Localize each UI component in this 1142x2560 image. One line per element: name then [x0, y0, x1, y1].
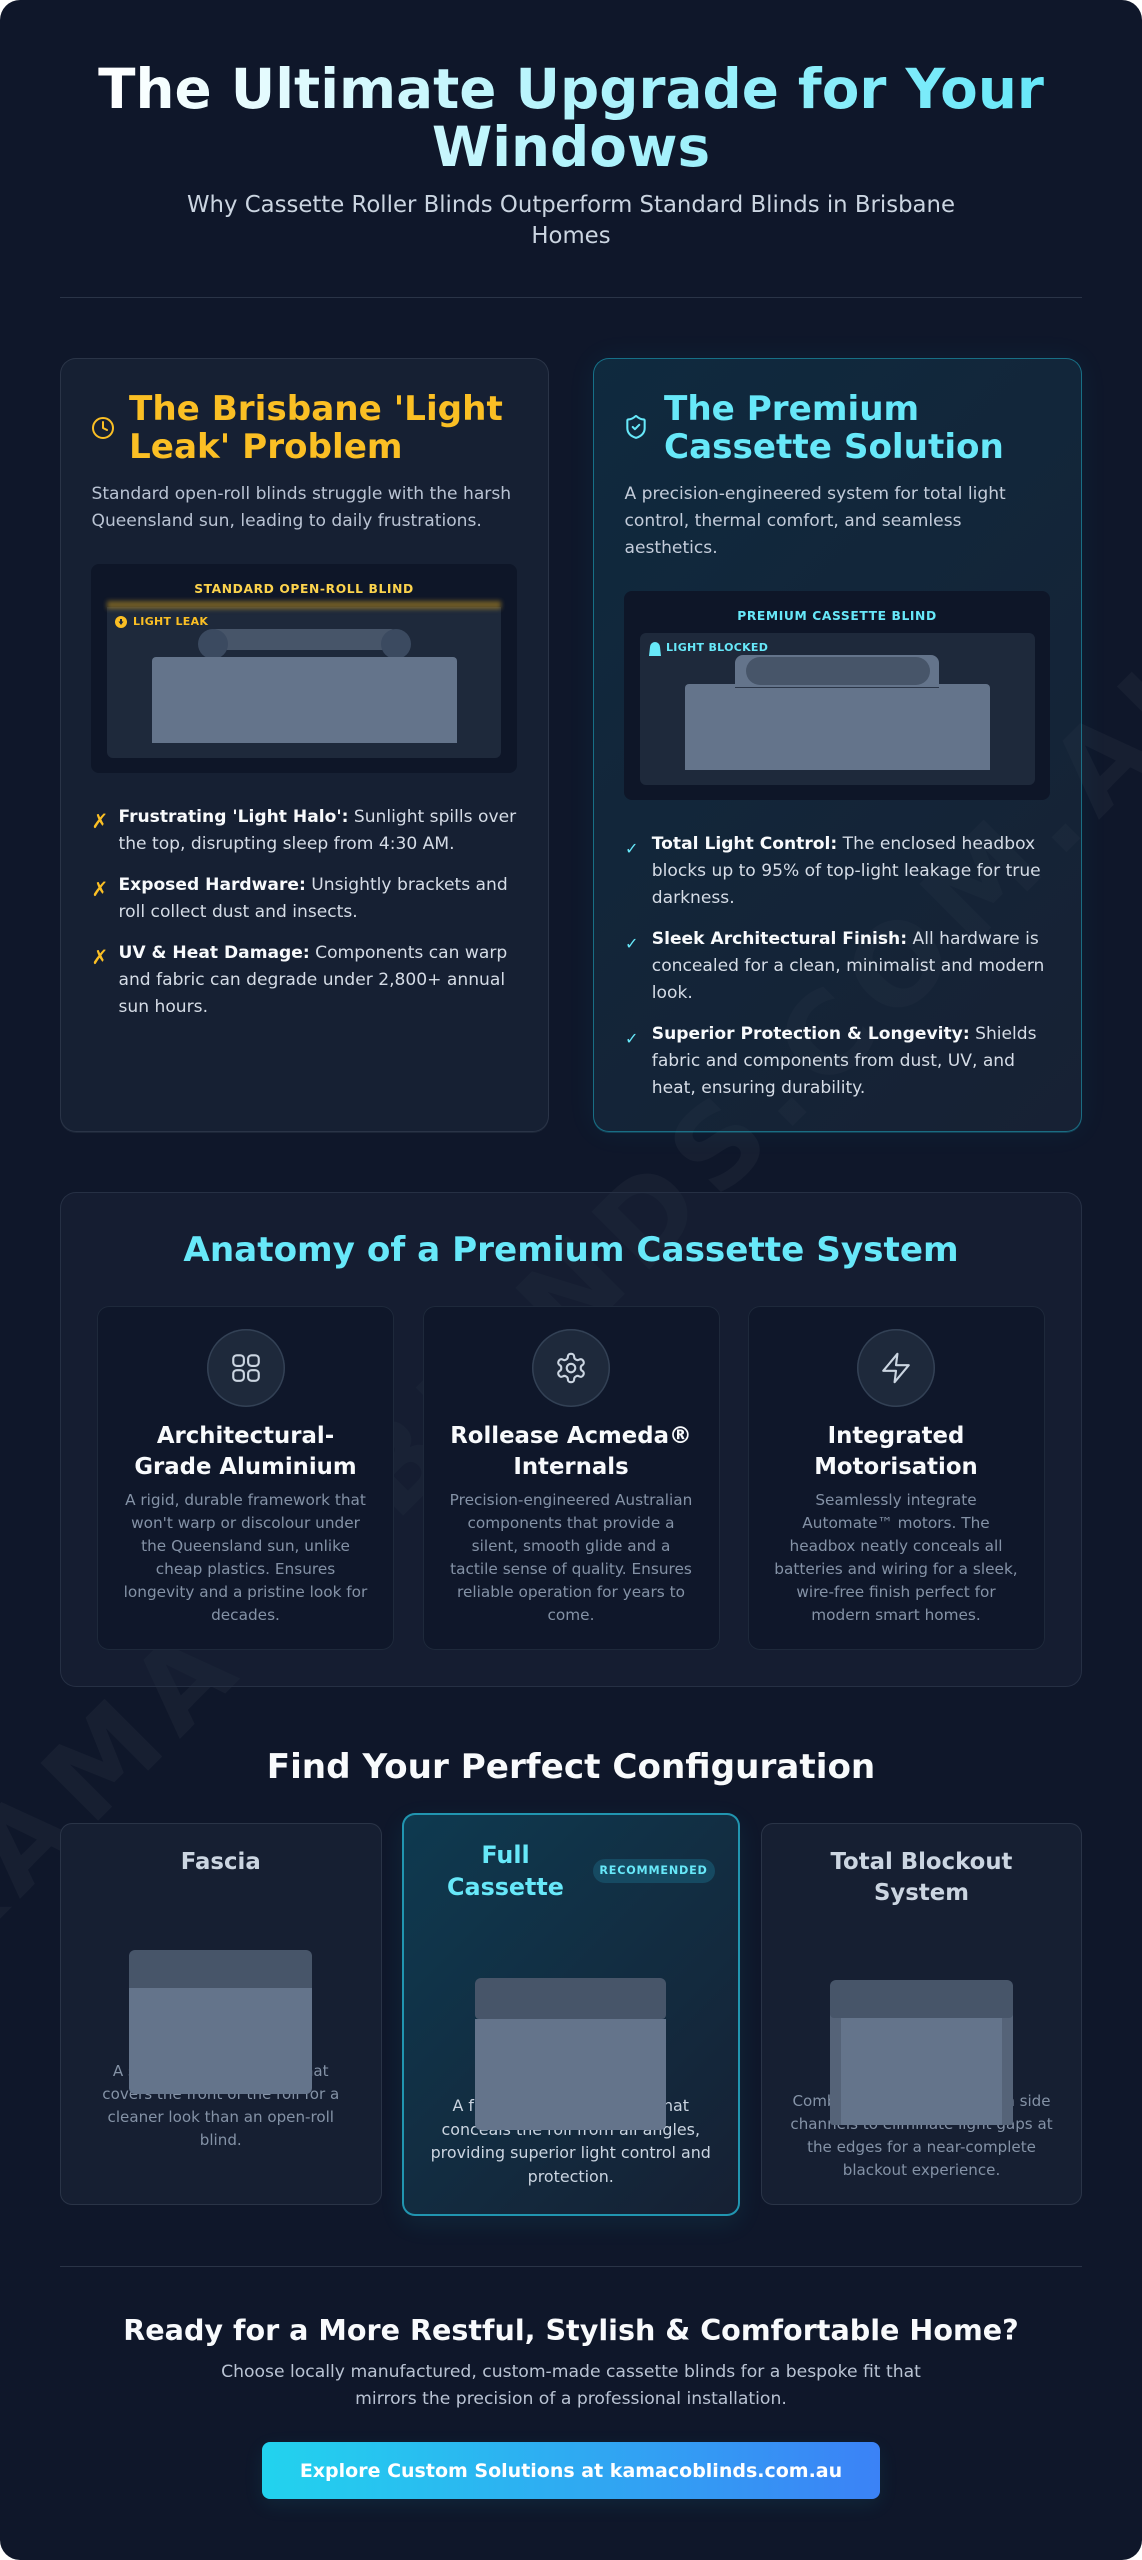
- feature text: [450, 1491, 692, 1624]
- exposed roller: [212, 629, 395, 650]
- feature text: longevity and a pristine look for: [124, 1583, 367, 1601]
- item: superior protection: ✓: [625, 1028, 638, 1048]
- icon: light blocked: [649, 642, 661, 656]
- item: light halo: Frustrating 'Light Halo': Sunlight spills over: [118, 807, 516, 827]
- left bracket: [198, 629, 228, 659]
- item: UV damage: UV & Heat Damage: Components can warp: [118, 943, 507, 963]
- item: exposed hardware: [92, 875, 508, 922]
- icon: gear: [532, 1329, 610, 1407]
- feature text: tactile sense of quality. Ensures: [450, 1560, 692, 1578]
- problem intro text: [92, 484, 511, 531]
- icon: shield check: [626, 415, 646, 439]
- item: exposed hardware: Exposed Hardware: Unsightly brackets and: [118, 875, 508, 895]
- heading: problem: Leak' Problem: [129, 427, 403, 467]
- icon: clock: [92, 417, 114, 439]
- item: total light control: [625, 834, 1041, 908]
- graphic: blockout blind: [830, 1980, 1013, 2125]
- header: [98, 57, 1044, 249]
- item: light halo: the top, disrupting sleep from 4:30 AM.: [118, 834, 455, 854]
- item: total light control: blocks up to 95% of top-light leakage for true: [652, 861, 1041, 881]
- feature text: modern smart homes.: [811, 1606, 981, 1624]
- heading: problem: The Brisbane 'Light: [129, 388, 503, 428]
- item: total light control: darkness.: [652, 888, 735, 908]
- heading: anatomy: Anatomy of a Premium Cassette System: [183, 1230, 959, 1270]
- solution intro text: A precision-engineered system for total light: [624, 484, 1006, 504]
- item: UV damage: [92, 943, 507, 1017]
- item: UV damage: and fabric can degrade under 2,800+ annual: [118, 970, 505, 990]
- CTA heading: Ready for a More Restful, Stylish & Comfortable Home?: [123, 2313, 1019, 2347]
- feature text: Automate™ motors. The: [802, 1514, 990, 1532]
- subtitle: Why Cassette Roller Blinds Outperform Standard Blinds in Brisbane: [187, 192, 955, 218]
- feature text: components that provide a: [468, 1514, 674, 1532]
- feature title: [814, 1423, 978, 1480]
- graphic: cassette blind: [475, 1978, 666, 2130]
- feature: aluminium: [97, 1306, 394, 1650]
- problem list: [92, 807, 516, 1017]
- solution intro text: control, thermal comfort, and seamless: [624, 511, 962, 531]
- item: sleek finish: [625, 929, 1044, 1003]
- feature title: Architectural-: [157, 1423, 334, 1449]
- subtitle: [187, 192, 955, 249]
- subtitle: Homes: [531, 223, 611, 249]
- item: superior protection: fabric and components from dust, UV, and: [652, 1051, 1015, 1071]
- item: total light control: ✓: [625, 838, 638, 858]
- solution intro text: [624, 484, 1006, 558]
- feature text: silent, smooth glide and a: [472, 1537, 670, 1555]
- option: fascia: [60, 1823, 382, 2205]
- option text: [790, 2092, 1053, 2179]
- option title: [447, 1841, 564, 1901]
- inner roll: [746, 657, 930, 685]
- icon: grid: [206, 1329, 284, 1407]
- feature title: Internals: [513, 1454, 629, 1480]
- heading: solution: [664, 388, 1004, 467]
- blind fabric: [685, 684, 990, 770]
- item: UV damage: ✗: [92, 944, 108, 968]
- diagram: premium cassette blind: [624, 591, 1050, 800]
- icon: light leak dot: [115, 616, 127, 628]
- feature text: won't warp or discolour under: [131, 1514, 360, 1532]
- option text: Combines a full cassette with side: [792, 2092, 1051, 2110]
- option title: Total Blockout: [831, 1849, 1012, 1875]
- blind fabric: [152, 657, 457, 743]
- feature text: [124, 1491, 368, 1624]
- option title: System: [874, 1880, 969, 1906]
- option text: conceals the roll from all angles,: [441, 2120, 700, 2139]
- feature text: A rigid, durable framework that: [125, 1491, 366, 1509]
- heading: problem: [129, 388, 503, 467]
- item: exposed hardware: roll collect dust and insects.: [118, 902, 358, 922]
- item: superior protection: Superior Protection & Longevity: Shields: [652, 1024, 1037, 1044]
- feature text: come.: [548, 1606, 594, 1624]
- feature text: headbox neatly conceals all: [790, 1537, 1002, 1555]
- right bracket: [381, 629, 411, 659]
- option text: [431, 2096, 711, 2186]
- CTA text: Choose locally manufactured, custom-made cassette blinds for a bespoke fit that: [221, 2362, 921, 2382]
- feature text: Seamlessly integrate: [815, 1491, 977, 1509]
- heading: configuration: Find Your Perfect Configuration: [267, 1746, 875, 1786]
- light leak glow: [107, 601, 501, 609]
- option title: Full: [481, 1841, 530, 1869]
- item: sleek finish: Sleek Architectural Finish: All hardware is: [652, 929, 1039, 949]
- feature text: Precision-engineered Australian: [450, 1491, 692, 1509]
- item: superior protection: heat, ensuring durability.: [652, 1078, 865, 1098]
- recommended badge: [592, 1859, 714, 1883]
- option text: blind.: [200, 2131, 242, 2149]
- item: sleek finish: look.: [652, 983, 693, 1003]
- option text: the edges for a near-complete: [807, 2138, 1036, 2156]
- option text: protection.: [528, 2167, 614, 2186]
- feature text: wire-free finish perfect for: [796, 1583, 996, 1601]
- light leak label: LIGHT LEAK: [133, 615, 208, 628]
- CTA button: Explore Custom Solutions at kamacoblinds.com.au: [300, 2460, 842, 2482]
- option: full cassette (recommended): [402, 1813, 740, 2216]
- option text: covers the front of the roll for a: [102, 2085, 339, 2103]
- solution intro text: aesthetics.: [624, 538, 718, 558]
- item: light halo: [92, 807, 516, 854]
- diagram label: PREMIUM CASSETTE BLIND: [737, 609, 937, 623]
- option text: providing superior light control and: [431, 2143, 711, 2162]
- title: The Ultimate Upgrade for Your: [98, 57, 1044, 121]
- feature text: batteries and wiring for a sleek,: [774, 1560, 1018, 1578]
- solution list: [625, 834, 1044, 1098]
- feature: internals: [422, 1306, 720, 1650]
- cassette headbox: [735, 655, 939, 688]
- item: total light control: Total Light Control: The enclosed headbox: [652, 834, 1035, 854]
- CTA text: mirrors the precision of a professional installation.: [355, 2389, 787, 2409]
- feature title: Rollease Acmeda®: [450, 1423, 692, 1449]
- option text: A sleek, simple headrail that: [113, 2062, 329, 2080]
- item: sleek finish: ✓: [625, 934, 638, 952]
- diagram: standard open-roll blind: [91, 564, 517, 773]
- option text: blackout experience.: [843, 2161, 1000, 2179]
- item: sleek finish: concealed for a clean, minimalist and modern: [652, 956, 1044, 976]
- item: exposed hardware: ✗: [92, 876, 108, 900]
- option text: cleaner look than an open-roll: [108, 2108, 334, 2126]
- feature text: [774, 1491, 1018, 1624]
- window backdrop: [107, 607, 501, 758]
- option title: Fascia: [181, 1849, 261, 1875]
- call to action: [123, 2313, 1019, 2503]
- problem intro text: Standard open-roll blinds struggle with the harsh: [92, 484, 511, 504]
- feature text: cheap plastics. Ensures: [156, 1560, 335, 1578]
- icon: bolt: [857, 1329, 935, 1407]
- panel: the premium cassette solution: [593, 358, 1082, 1132]
- panel: the Brisbane light leak problem: [60, 358, 549, 1132]
- problem intro text: Queensland sun, leading to daily frustrations.: [92, 511, 482, 531]
- item: light halo: ✗: [92, 808, 108, 832]
- recommended badge: RECOMMENDED: [599, 1864, 708, 1877]
- heading: solution: The Premium: [664, 388, 919, 428]
- feature title: Grade Aluminium: [134, 1454, 357, 1480]
- option text: channels to eliminate light gaps at: [790, 2115, 1053, 2133]
- option: total blockout system: [761, 1823, 1082, 2205]
- title: [60, 61, 1082, 176]
- feature text: reliable operation for years to: [457, 1583, 685, 1601]
- feature title: [134, 1423, 357, 1480]
- diagram label: STANDARD OPEN-ROLL BLIND: [194, 582, 414, 596]
- feature text: decades.: [211, 1606, 280, 1624]
- option text: A fully enclosed headbox that: [452, 2096, 689, 2115]
- heading: solution: Cassette Solution: [664, 427, 1004, 467]
- panel: anatomy of a premium cassette system: [60, 1192, 1082, 1687]
- CTA text: [221, 2362, 921, 2409]
- feature text: the Queensland sun, unlike: [141, 1537, 350, 1555]
- feature title: Motorisation: [814, 1454, 978, 1480]
- graphic: fascia blind: [129, 1950, 312, 2094]
- feature title: Integrated: [828, 1423, 964, 1449]
- feature: motorisation: [748, 1306, 1044, 1650]
- title: Windows: [432, 115, 710, 179]
- feature title: [450, 1423, 692, 1480]
- option title: Cassette: [447, 1873, 564, 1901]
- light blocked label: LIGHT BLOCKED: [666, 641, 768, 654]
- item: UV damage: sun hours.: [118, 997, 208, 1017]
- window backdrop: [640, 633, 1035, 785]
- item: superior protection: [625, 1024, 1037, 1098]
- option title: [830, 1849, 1012, 1906]
- option text: [102, 2062, 339, 2149]
- CTA button: [262, 2442, 880, 2499]
